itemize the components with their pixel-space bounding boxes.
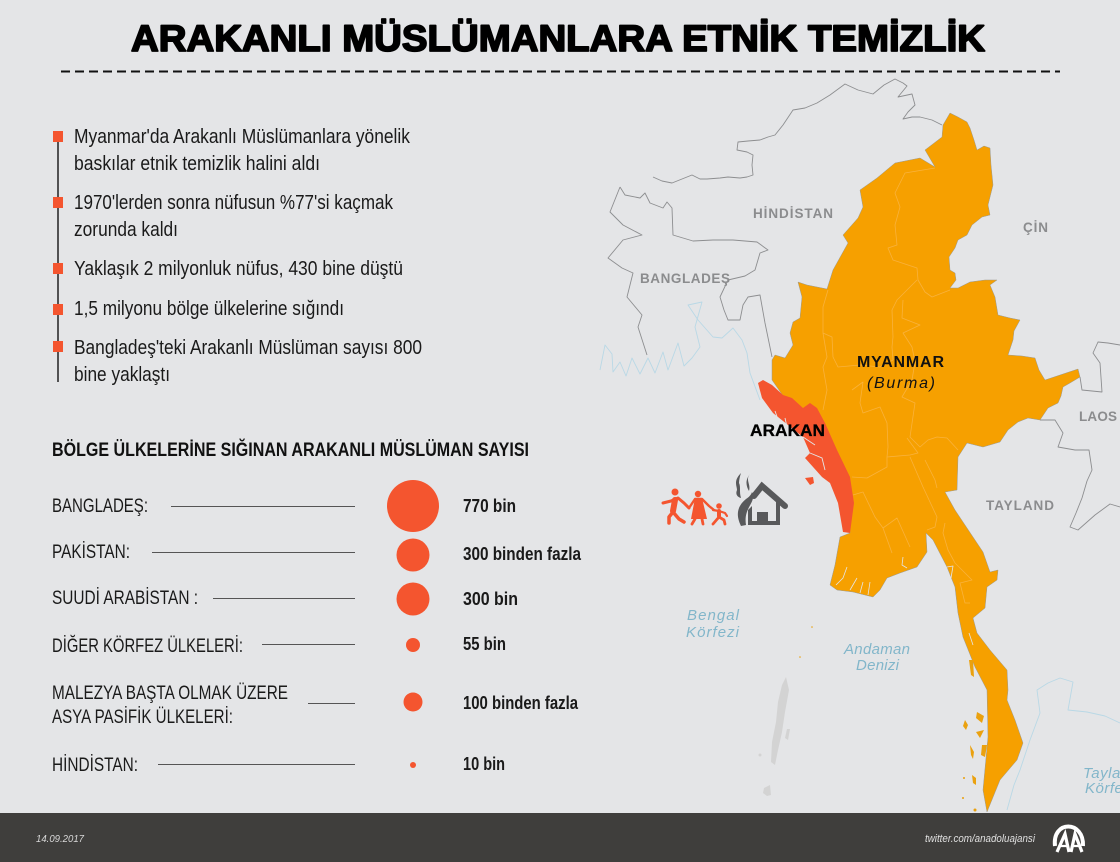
row: Saudi Arabia: SUUDİ ARABİSTAN : (52, 588, 198, 609)
row: Saudi Arabia: 300 bin (463, 589, 518, 609)
row: Asia Pacific: 100 binden fazla (463, 693, 579, 713)
delta and coastal inlets (836, 557, 973, 645)
Myanmar label: (Burma) (867, 375, 935, 392)
neighbouring country borders (608, 79, 1120, 530)
country labels: TAYLAND (986, 498, 1054, 513)
row: Pakistan: 300 binden fazla (463, 544, 582, 564)
social handle: twitter.com/anadoluajansi (925, 833, 1035, 845)
row: Pakistan (52, 538, 582, 572)
Andaman islands (758, 677, 790, 796)
row: other Gulf countries (52, 634, 506, 657)
sea labels: Bengal (687, 607, 740, 624)
Arakan label: ARAKAN (750, 421, 825, 440)
sea labels: Andaman (843, 641, 910, 658)
country labels: ÇİN (1023, 220, 1048, 235)
sea labels: Körfezi (686, 624, 740, 641)
row: Bangladesh: 770 bin (463, 496, 516, 516)
row: Asia Pacific (52, 683, 579, 728)
key point 1: baskılar etnik temizlik halini aldı (74, 153, 320, 175)
Myanmar (772, 113, 1080, 812)
refugee chart heading: BÖLGE ÜLKELERİNE SIĞINAN ARAKANLI MÜSLÜMAN SAYISI (52, 439, 529, 461)
row: Asia Pacific: ASYA PASİFİK ÜLKELERİ: (52, 707, 233, 728)
key point 1: Myanmar'da Arakanlı Müslümanlara yönelik (74, 126, 411, 148)
row: other Gulf countries: DİĞER KÖRFEZ ÜLKELERİ: (52, 635, 243, 657)
map: Myanmar and neighbours (600, 79, 1120, 812)
key point 2: 1970'lerden sonra nüfusun %77'si kaçmak (74, 192, 394, 214)
icon: burning house (736, 473, 785, 526)
sea labels (686, 607, 1120, 797)
title divider (61, 70, 1060, 72)
row: Pakistan: PAKİSTAN: (52, 542, 130, 563)
key point 2: zorunda kaldı (74, 219, 178, 241)
country labels: BANGLADEŞ (640, 271, 730, 286)
date: 14.09.2017 (36, 834, 84, 845)
footer bar (0, 813, 1120, 862)
key point 5: Bangladeş'teki Arakanlı Müslüman sayısı 800 (74, 337, 422, 359)
icon: fleeing family (663, 488, 727, 524)
row: Asia Pacific: MALEZYA BAŞTA OLMAK ÜZERE (52, 683, 288, 704)
sea labels: Denizi (856, 657, 900, 674)
Myanmar label: MYANMAR (857, 354, 944, 371)
country labels (640, 206, 1117, 513)
title: ARAKANLI MÜSLÜMANLARA ETNİK TEMİZLİK (131, 17, 985, 59)
internal state borders (823, 168, 972, 603)
icon: AA logo (1055, 826, 1083, 852)
row: India (52, 754, 505, 776)
row: Bangladesh (52, 480, 516, 532)
key point 5 (53, 337, 422, 386)
rivers and coastline (600, 302, 1120, 810)
Myanmar label (857, 354, 944, 392)
row: Bangladesh: BANGLADEŞ: (52, 496, 148, 517)
row: India: HİNDİSTAN: (52, 755, 138, 776)
key point 4: 1,5 milyonu bölge ülkelerine sığındı (74, 298, 344, 320)
country labels: LAOS (1079, 409, 1117, 424)
key point 2 (53, 192, 394, 241)
country labels: HİNDİSTAN (753, 206, 833, 221)
southern Myanmar islands (799, 626, 987, 812)
key point 1 (53, 126, 411, 175)
key points list (53, 126, 422, 386)
key point 5: bine yaklaştı (74, 364, 170, 386)
Arakan region (758, 380, 854, 533)
key point 3: Yaklaşık 2 milyonluk nüfus, 430 bine düştü (74, 258, 403, 280)
row: India: 10 bin (463, 754, 505, 774)
row: Saudi Arabia (52, 582, 518, 616)
bubble chart: refugees by country (52, 480, 582, 776)
row: other Gulf countries: 55 bin (463, 634, 506, 654)
